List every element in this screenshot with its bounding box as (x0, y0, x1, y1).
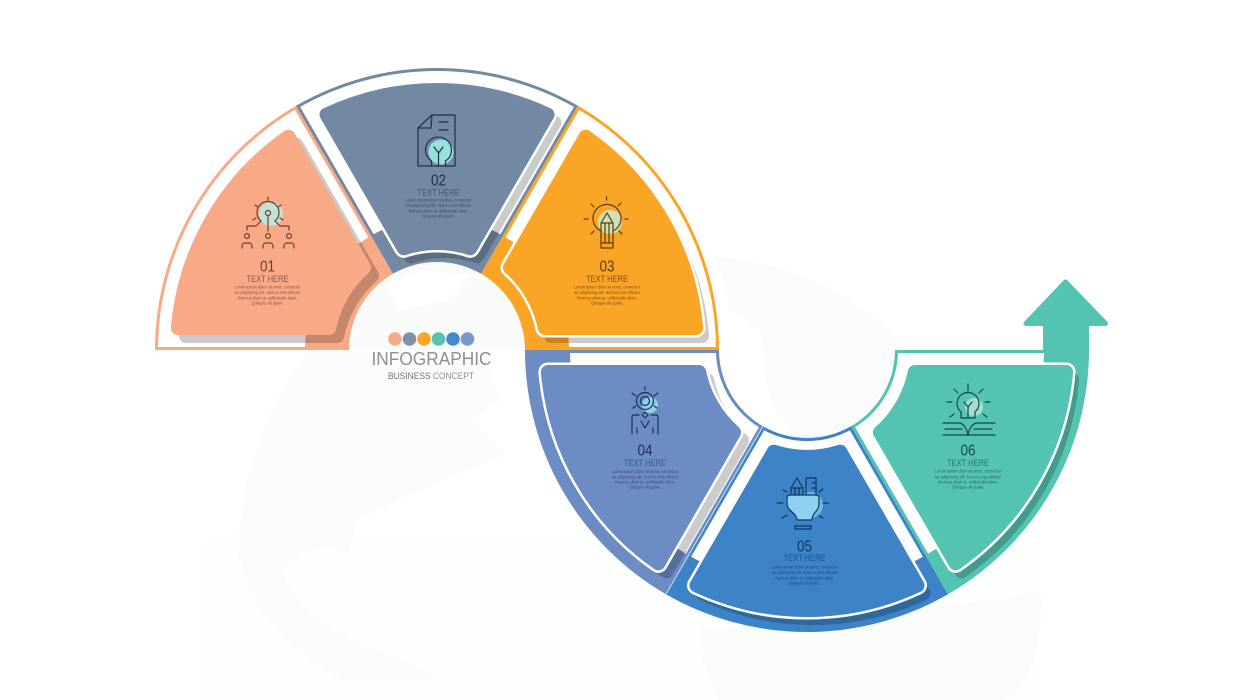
text: step 02: Lorem ipsum dolor sit amet, consectur (406, 198, 472, 202)
panel 01: peach sector (155, 106, 393, 350)
text: step 05: TEXT HERE (784, 553, 826, 564)
text: step 06: tur adipiscing elit. Sed eu erat efficitur (935, 474, 1002, 480)
text: step 01: 01 (260, 258, 275, 276)
text: step 02 (406, 172, 472, 218)
text: step 06 (935, 442, 1002, 490)
text: step 04: TEXT HERE (624, 458, 666, 469)
text: step 03: TEXT HERE (586, 274, 628, 285)
text: step 02: Quisque elit quam. (422, 214, 454, 218)
text: step 01 (234, 258, 301, 306)
text: step 04: Lorem ipsum dolor sit amet, consectur (612, 469, 679, 474)
text: step 04: rhoncus diam at, sollicitudin diam. (615, 480, 675, 484)
text: step 03: tur adipiscing elit. Sed eu erat efficitur (574, 290, 641, 295)
center title (372, 349, 492, 382)
text: step 05: Lorem ipsum dolor sit amet, consectur (772, 564, 838, 570)
panel 05: blue sector (666, 426, 948, 632)
text: step 06: Quisque elit quam. (952, 484, 984, 490)
icon: lightbulb over open book (943, 384, 995, 435)
arrow (1026, 282, 1106, 353)
text: step 04: 04 (638, 442, 653, 460)
center legend dots (388, 332, 474, 346)
center title: INFOGRAPHIC (372, 349, 492, 369)
text: step 03: 03 (600, 258, 615, 276)
text: step 02: tur adipiscing elit. Sed eu erat efficitur (406, 203, 472, 208)
text: step 01: tur adipiscing elit. Sed eu erat efficitur (234, 290, 301, 295)
text: step 01: rhoncus diam at, sollicitudin diam. (238, 296, 298, 300)
panel 03: orange sector (481, 106, 719, 350)
text: step 06: Lorem ipsum dolor sit amet, consectur (935, 468, 1002, 474)
icon: person with gear (632, 387, 658, 434)
text: step 03 (574, 258, 641, 306)
text: step 06: 06 (960, 442, 976, 460)
text: step 01: Quisque elit quam. (252, 300, 284, 306)
text: step 05 (772, 538, 838, 586)
text: step 05: tur adipiscing elit. Sed eu erat efficitur (772, 570, 838, 575)
text: step 01: TEXT HERE (246, 274, 288, 285)
panel 02: slate sector (296, 68, 578, 274)
background: faint world map (205, 257, 1041, 700)
text: step 04: tur adipiscing elit. Sed eu erat efficitur (612, 474, 679, 480)
text: step 01: Lorem ipsum dolor sit amet, consectur (234, 284, 301, 290)
text: step 03: Lorem ipsum dolor sit amet, consectur (574, 284, 641, 290)
panel 04: periwinkle sector (525, 350, 763, 594)
text: step 04 (612, 442, 679, 490)
text: step 05: Quisque elit quam. (788, 580, 820, 586)
text: step 02: rhoncus diam at, sollicitudin diam. (408, 208, 468, 214)
icon: document with lightbulb (418, 115, 455, 166)
text: step 03: rhoncus diam at, sollicitudin diam. (577, 296, 637, 300)
icon: pencil and ruler in bulb (777, 478, 828, 529)
text: step 02: TEXT HERE (418, 188, 460, 198)
icon: lightbulb and team (242, 197, 294, 248)
icon: pencil in lightbulb (584, 197, 628, 248)
text: step 03: Quisque elit quam. (591, 300, 623, 306)
text: step 05: 05 (797, 538, 812, 556)
panel 06: teal sector with arrow (851, 282, 1106, 594)
center title: BUSINESS CONCEPT (388, 371, 474, 382)
text: step 02: 02 (431, 172, 446, 190)
text: step 05: rhoncus diam at, sollicitudin diam. (774, 576, 834, 580)
text: step 04: Quisque elit quam. (629, 484, 661, 490)
text: step 06: TEXT HERE (947, 458, 989, 469)
text: step 06: rhoncus diam at, sollicitudin diam. (938, 480, 998, 484)
